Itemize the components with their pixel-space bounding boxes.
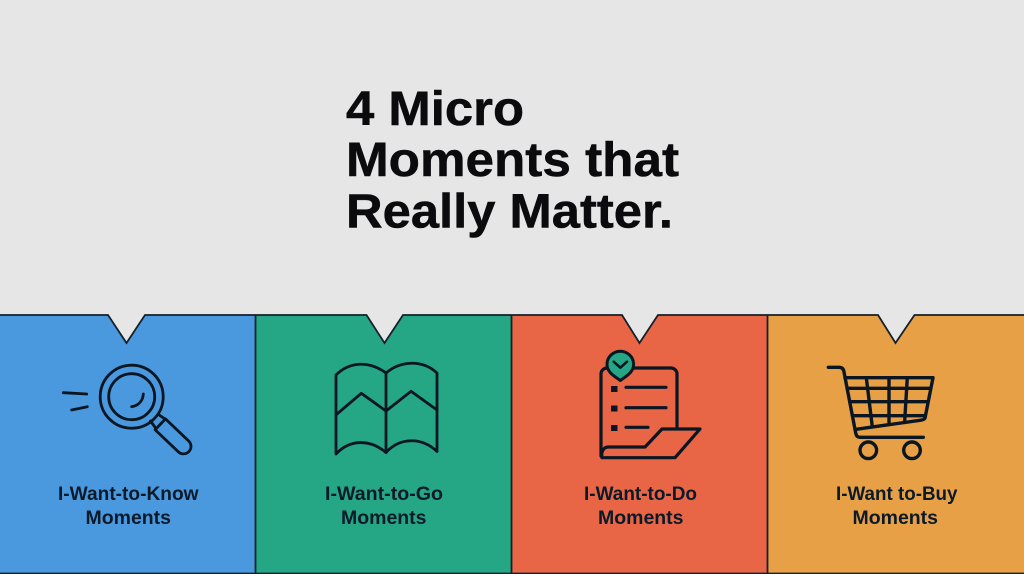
- panel: I-Want-to-Go Moments: [256, 314, 512, 574]
- label: I-Want-to-Go Moments: Moments: [341, 508, 426, 529]
- icon: magnifying glass: [63, 365, 194, 457]
- label: I-Want-to-Buy Moments: [836, 484, 958, 529]
- label: I-Want-to-Do Moments: I-Want-to-Do: [584, 484, 697, 505]
- notch: panel 2: [366, 314, 403, 343]
- label: I-Want-to-Go Moments: [325, 484, 443, 529]
- label: I-Want-to-Know Moments: I-Want-to-Know: [58, 484, 199, 505]
- notch: panel 4: [878, 314, 914, 343]
- panel: I-Want-to-Do Moments: [512, 314, 768, 574]
- icon: green check badge: [607, 351, 634, 380]
- notch: panel 1: [108, 314, 145, 343]
- panel: I-Want-to-Know Moments: [0, 314, 256, 574]
- label: I-Want-to-Do Moments: [584, 484, 697, 529]
- panel: I-Want-to-Buy Moments: [768, 314, 1024, 574]
- icon: shopping cart: [828, 367, 933, 459]
- label: I-Want-to-Go Moments: I-Want-to-Go: [325, 484, 443, 505]
- notch: panel 3: [622, 314, 658, 343]
- title: 4 Micro: [346, 83, 524, 136]
- title: Moments that: [346, 134, 679, 187]
- label: I-Want-to-Know Moments: [58, 484, 199, 529]
- icon: folded map: [336, 363, 437, 454]
- title: [346, 83, 679, 238]
- label: I-Want-to-Buy Moments: Moments: [852, 508, 938, 529]
- label: I-Want-to-Buy Moments: I-Want to-Buy: [836, 484, 958, 505]
- label: I-Want-to-Do Moments: Moments: [598, 508, 684, 529]
- title: Really Matter.: [346, 186, 673, 238]
- icon: checklist with folder: [601, 351, 700, 458]
- label: I-Want-to-Know Moments: Moments: [86, 508, 171, 529]
